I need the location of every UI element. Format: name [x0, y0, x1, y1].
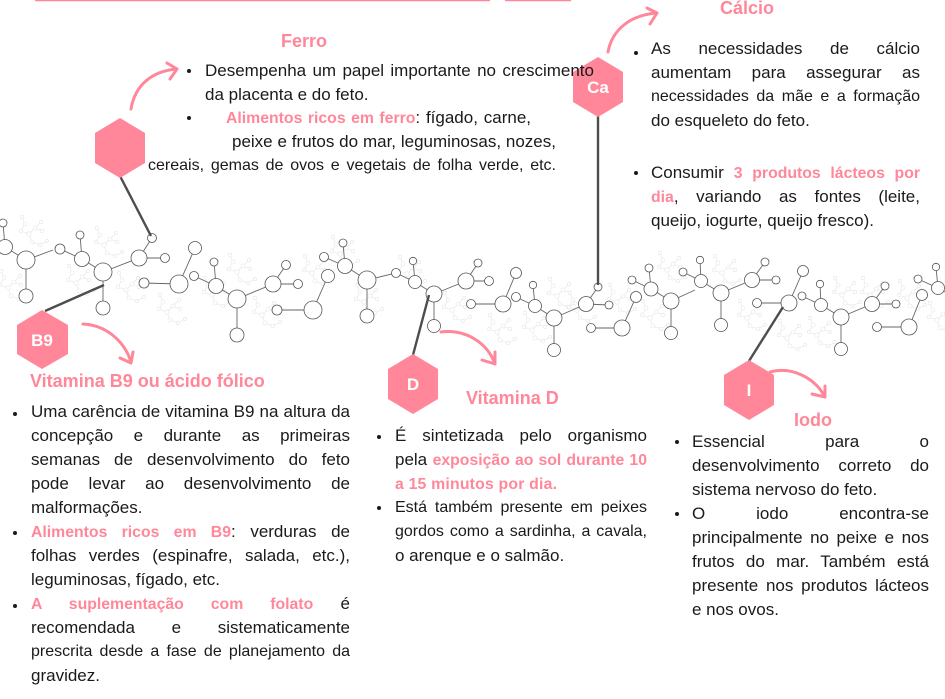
text block: Iodo: e nos ovos.	[692, 600, 779, 619]
arrow: I	[770, 370, 825, 397]
heading: Vitamina D: Vitamina D	[466, 388, 559, 408]
text block: Vitamina B9: pode levar ao desenvolvimento de	[31, 474, 350, 493]
text block: Vitamina B9: folhas verdes (espinafre, salada, etc.),	[31, 546, 350, 565]
arrow: B9	[83, 324, 133, 363]
text block: Cálcio	[634, 39, 920, 230]
text block: Vitamina B9: recomendada e sistematicamente	[31, 618, 350, 637]
heading: Ferro: Ferro	[281, 31, 327, 51]
text block: Vitamina B9: prescrita desde a fase de planejamento da	[31, 643, 350, 660]
text block: Ferro: cereais, gemas de ovos e vegetais de folha verde, etc.	[148, 157, 556, 174]
text block: Vitamina B9	[13, 402, 350, 685]
heading: Vitamina B9: Vitamina B9 ou ácido fólico	[30, 371, 265, 391]
text block: Iodo: sistema nervoso do feto.	[692, 480, 877, 499]
text block: Vitamina D	[377, 426, 647, 565]
text block: Vitamina D: pela exposição ao sol durante 10	[395, 450, 647, 469]
text block: Cálcio: aumentam para assegurar as	[651, 63, 920, 82]
badge label: I: I	[747, 381, 751, 400]
top rule fragments	[35, 0, 571, 2]
faint background molecules	[0, 215, 945, 351]
text block: Iodo: principalmente no peixe e nos	[692, 528, 929, 547]
arrow: D	[441, 332, 495, 364]
text block: Cálcio: queijo, iogurte, queijo fresco).	[651, 211, 874, 230]
text block: Cálcio: necessidades da mãe e a formação	[651, 88, 920, 105]
molecule bonds	[3, 223, 945, 350]
text block: Vitamina D: Está também presente em peixes	[395, 499, 647, 516]
text block: Iodo: O iodo encontra-se	[692, 504, 929, 523]
text block: Vitamina B9: semanas de desenvolvimento do feto	[31, 450, 350, 469]
arrow: iron	[131, 63, 177, 109]
text block: Cálcio: do esqueleto do feto.	[651, 111, 810, 130]
hexagon: I	[724, 360, 774, 420]
molecule atoms	[0, 219, 944, 356]
text block: Ferro: da placenta e do feto.	[205, 85, 369, 104]
text block: Cálcio: Consumir 3 produtos lácteos por	[651, 163, 920, 182]
badge label: B9: B9	[31, 331, 53, 350]
text block: Ferro	[148, 61, 594, 174]
hexagon: calcium	[573, 57, 623, 117]
text block: Vitamina B9: concepção e durante as primeiras	[31, 426, 350, 445]
text block: Iodo: desenvolvimento correto do	[692, 456, 929, 475]
text block: Vitamina B9: A suplementação com folato é	[31, 594, 350, 613]
arrow: calcium	[608, 8, 657, 52]
text block: Iodo: presente nos produtos lácteos	[692, 576, 929, 595]
text block: Cálcio: As necessidades de cálcio	[651, 39, 920, 58]
text block: Ferro: Alimentos ricos em ferro: fígado, carne,	[226, 108, 531, 127]
hexagon: D	[388, 354, 438, 414]
text block: Vitamina B9: Uma carência de vitamina B9 na altura da	[31, 402, 350, 421]
heading: Iodo: Iodo	[794, 410, 832, 430]
text block: Ferro: Desempenha um papel importante no crescimento	[205, 61, 594, 80]
text block: Vitamina B9: Alimentos ricos em B9: verduras de	[31, 522, 350, 541]
text block: Iodo: frutos do mar. Também está	[692, 552, 929, 571]
text block: Iodo: Essencial para o	[692, 432, 929, 451]
text block: Vitamina D: É sintetizada pelo organismo	[395, 426, 647, 445]
text block: Vitamina D: gordos como a sardinha, a cavala,	[395, 523, 647, 540]
badge label: D: D	[407, 375, 419, 394]
text block: Vitamina B9: gravidez.	[31, 666, 100, 685]
text block: Vitamina B9: malformações.	[31, 498, 142, 517]
badge label: Ca: Ca	[587, 78, 609, 97]
text block: Vitamina D: a 15 minutos por dia.	[395, 476, 557, 493]
text block: Cálcio: dia, variando as fontes (leite,	[651, 187, 920, 206]
text block: Vitamina B9: leguminosas, fígado, etc.	[31, 570, 220, 589]
text block: Vitamina D: o arenque e o salmão.	[395, 546, 564, 565]
text block: Ferro: peixe e frutos do mar, leguminosas, nozes,	[232, 132, 556, 151]
text block: Iodo	[675, 432, 929, 619]
hexagon: iron	[95, 118, 145, 178]
hexagon: B9	[17, 310, 68, 369]
